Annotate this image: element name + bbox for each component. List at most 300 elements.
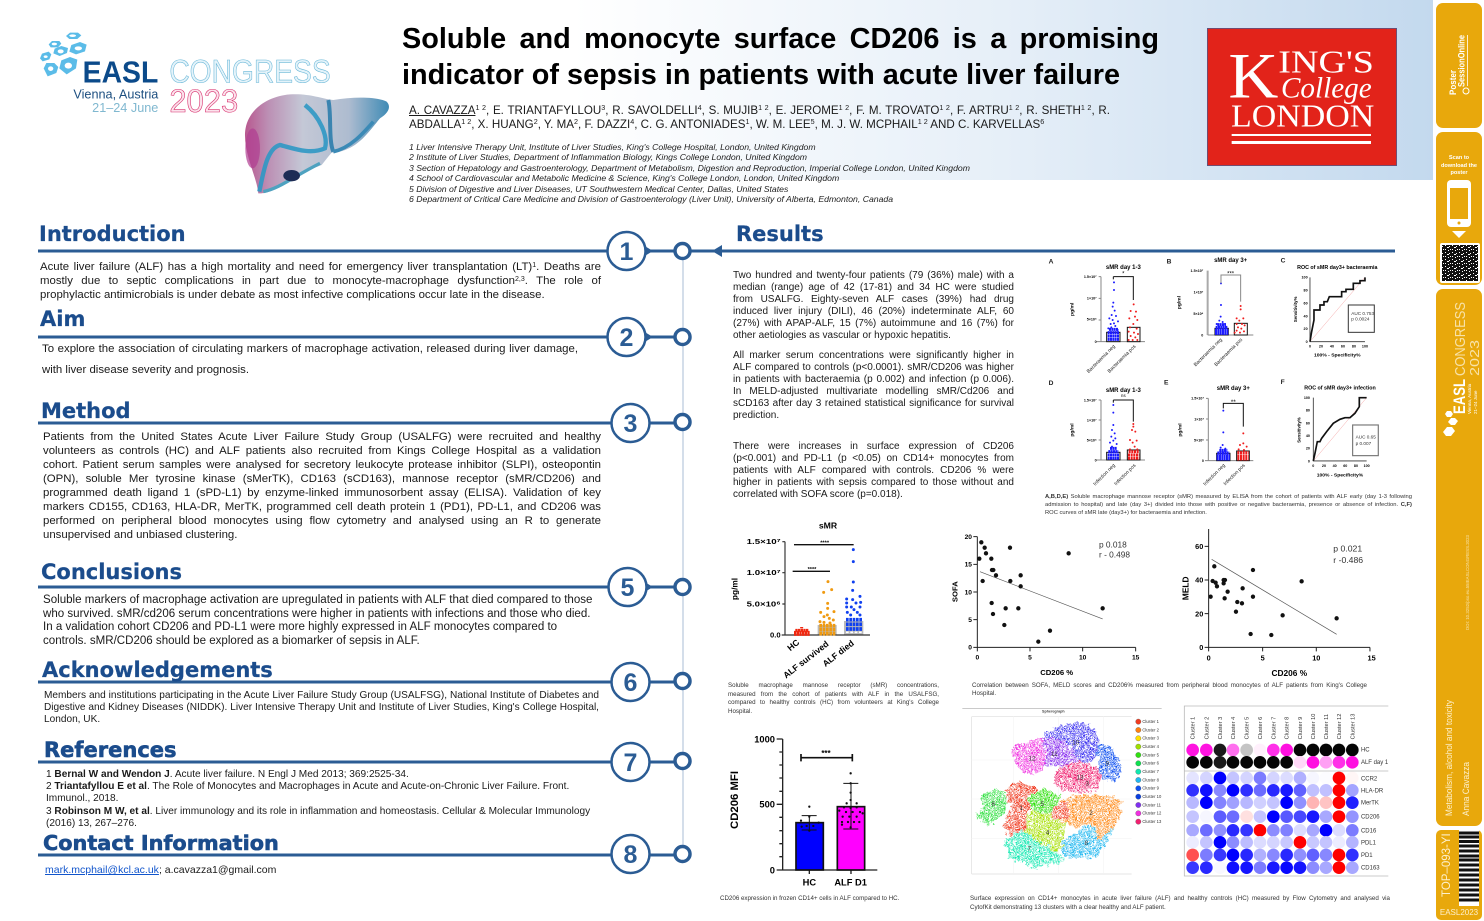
- text: results surface expression: (p<0.001) and PD-L1 (p <0.05) on CD14+ monocytes from: [733, 453, 1014, 464]
- chart D: sMR day 1-3 infection: 1.5×10⁷: [1084, 398, 1097, 402]
- chart B: sMR day 3+ bacteraemia: Bacteraemia neg: [1193, 337, 1224, 368]
- text: results surface expression: correlated with SOFA score (p=0.018).: [733, 489, 903, 500]
- scatter chart: MELD vs CD206%: 40: [1195, 576, 1203, 585]
- scatter chart: SOFA vs CD206%: 0: [968, 645, 972, 652]
- text: references: [46, 769, 590, 829]
- text: introduction: prophylactic antimicrobials is under debate as most infective complications occur late in the disease.: [40, 289, 545, 301]
- heatmap: cluster marker expression: CCR2: [1361, 776, 1378, 782]
- chart F: ROC infection: ROC of sMR day3+ infection: [1304, 385, 1376, 391]
- title: Soluble and monocyte surface CD206 is a promising: [402, 23, 1159, 55]
- text: results marker concentrations: in patients with bacteraemia (p 0.002) and infection (p 0.006).: [733, 374, 1014, 385]
- authors: [409, 103, 1110, 130]
- chart C: ROC bacteraemia: [1281, 258, 1378, 359]
- chart F: ROC infection: 60: [1306, 421, 1310, 425]
- chart B: sMR day 3+ bacteraemia: 1×10⁷: [1194, 290, 1204, 294]
- t-SNE cluster plot: Cluster 9: [1142, 786, 1160, 791]
- section marker 7: 7: [624, 749, 637, 777]
- heatmap: cluster marker expression: Cluster 3: [1218, 717, 1224, 739]
- text: results surface expression: higher in patients with sepsis compared to those without and: [733, 477, 1014, 488]
- chart C: ROC bacteraemia: C: [1281, 258, 1286, 265]
- caption: flow cytometry clusters: CytofKit demonstrating 13 clusters with a clear healthy and ALF patient.: [970, 904, 1166, 910]
- chart D: sMR day 1-3 infection: sMR day 1-3: [1106, 388, 1141, 394]
- chart C: ROC bacteraemia: 20: [1319, 345, 1323, 349]
- chart C: ROC bacteraemia: 100: [1302, 276, 1308, 280]
- caption: panels A-F: [1045, 494, 1412, 516]
- t-SNE cluster plot: Cluster 12: [1142, 811, 1162, 816]
- chart: sMR concentrations HC vs ALF: 0.0: [770, 630, 781, 639]
- chart E: sMR day 3+ infection: pg/ml: [1177, 423, 1183, 437]
- sidebar: PosterSessionOnline panel: [1436, 3, 1482, 128]
- chart: sMR concentrations HC vs ALF: HC: [785, 637, 802, 653]
- chart: sMR concentrations HC vs ALF: 1.0×10⁷: [747, 568, 781, 577]
- scatter chart: MELD vs CD206%: 15: [1368, 653, 1376, 662]
- text: aim: [42, 343, 578, 376]
- text: results summary: from USALFG. Eighty-seven ALF cases (39%) had drug: [733, 294, 1014, 305]
- scatter chart: MELD vs CD206%: p 0.021: [1333, 543, 1362, 553]
- chart A: sMR day 1-3 bacteraemia: 5×10⁶: [1087, 318, 1097, 322]
- t-SNE cluster plot: 2: [1089, 810, 1093, 817]
- text: method: volunteers as controls (HC) and ALF patients also recruited from Kings College Hospital as a validation: [43, 445, 601, 457]
- sidebar: congress and topic panel: CONGRESS: [1452, 302, 1469, 376]
- caption: sMR chart: measured from the cohort of patients with ALF in the USALFSG,: [728, 691, 939, 698]
- caption: panels A-F: ROC curves of sMR late (day3+) for bacteraemia and infection.: [1045, 510, 1207, 516]
- text: conclusions: Soluble markers of macrophage activation are upregulated in patients with ALF that died compared to those: [43, 594, 592, 606]
- heatmap: cluster marker expression: Cluster 12: [1337, 714, 1343, 739]
- affiliations: 3 Section of Hepatology and Gastroenterology, Department of Metabolism, Digestion and Reproduction, Imperial College London, United Kingdom: [409, 163, 970, 173]
- caption: sMR chart: [728, 682, 939, 715]
- t-SNE cluster plot: 3: [1086, 780, 1090, 787]
- t-SNE cluster plot: Cluster 5: [1142, 752, 1160, 757]
- heatmap: cluster marker expression: Cluster 1: [1191, 717, 1197, 739]
- heatmap: cluster marker expression: Cluster 10: [1311, 714, 1317, 739]
- heatmap: cluster marker expression: ALF day 1: [1361, 760, 1389, 766]
- text: acknowledgements: [44, 690, 599, 725]
- heatmap: cluster marker expression: PD1: [1361, 853, 1373, 859]
- text: method: Patients from the United States Acute Liver Failure Study Group (USALFG) were recruited and healthy: [43, 431, 601, 443]
- chart E: sMR day 3+ infection: 1×10⁷: [1194, 417, 1204, 421]
- chart F: ROC infection: 60: [1343, 464, 1347, 468]
- text: aim: To explore the association of circulating markers of macrophage activation, released during liver damage,: [42, 343, 578, 355]
- text: method: unsupervised and unbiased clustering.: [43, 529, 237, 541]
- authors: A. CAVAZZA1 2, E. TRIANTAFYLLOU3, R. SAVOLDELLI4, S. MUJIB1 2, E. JEROME1 2, F. M. TROVATO1 2, F. ARTRU1 2, R. SHETH1 2, R.: [409, 103, 1110, 116]
- caption: flow cytometry clusters: [970, 894, 1390, 910]
- section marker 6: [38, 663, 690, 701]
- text: results marker concentrations: In MELD-adjusted multivariate modelling sMR/Cd206 and: [733, 386, 1014, 397]
- scatter chart: SOFA vs CD206%: 0: [975, 654, 979, 661]
- chart: CD206 MFI bars: ***: [821, 749, 832, 758]
- chart F: ROC infection: 40: [1333, 464, 1337, 468]
- text: acknowledgements: London, UK.: [44, 714, 100, 725]
- sidebar: scan to download panel: poster: [1450, 170, 1468, 176]
- chart B: sMR day 3+ bacteraemia: 5×10⁶: [1193, 312, 1204, 316]
- t-SNE cluster plot: [962, 708, 1162, 874]
- sidebar: PosterSessionOnline panel: SessionOnline: [1456, 35, 1466, 87]
- chart: sMR concentrations HC vs ALF: sMR: [819, 520, 838, 530]
- chart E: sMR day 3+ infection: E: [1164, 380, 1169, 387]
- text: method: cohort. Patient serum samples were analysed for secretory leukocyte protease inhibitor (SLPI), osteopontin: [43, 459, 601, 471]
- affiliations: 6 Department of Critical Care Medicine and Division of Gastroenterology (Liver Unit), University of Alberta, Edmonton, Canada: [409, 194, 893, 204]
- scatter chart: MELD vs CD206%: 5: [1261, 653, 1265, 662]
- heatmap: cluster marker expression: Cluster 6: [1258, 717, 1264, 739]
- text: references: (2016) 13, 267–276.: [46, 818, 137, 829]
- logo: King's College London: K: [1228, 39, 1279, 111]
- t-SNE cluster plot: Cluster 1: [1142, 719, 1160, 724]
- text: references: 2 Triantafyllou E et al. The Role of Monocytes and Macrophages in Acute and Acute-on-Chronic Liver Failure. Front.: [46, 781, 569, 792]
- chart E: sMR day 3+ infection: 0: [1202, 459, 1204, 463]
- chart A: sMR day 1-3 bacteraemia: Bacteraemia neg: [1086, 344, 1117, 375]
- chart D: sMR day 1-3 infection: D: [1049, 380, 1054, 387]
- chart E: sMR day 3+ infection: 5×10⁶: [1194, 438, 1204, 442]
- chart A: sMR day 1-3 bacteraemia: 0: [1095, 340, 1097, 344]
- chart: sMR concentrations HC vs ALF: [729, 520, 870, 680]
- affiliations: 4 School of Cardiovascular and Metabolic Medicine & Science, King's College London, London, United Kingdom: [409, 173, 839, 183]
- heatmap: cluster marker expression: CD206: [1361, 815, 1380, 821]
- chart E: sMR day 3+ infection: **: [1231, 399, 1236, 406]
- text: aim: with liver disease severity and prognosis.: [42, 364, 249, 376]
- text: results surface expression: patients with ALF compared with controls. CD206 % were: [733, 465, 1014, 476]
- chart A: sMR day 1-3 bacteraemia: pg/ml: [1069, 302, 1075, 316]
- chart A: sMR day 1-3 bacteraemia: 1×10⁷: [1087, 297, 1097, 301]
- heatmap: cluster marker expression: CD16: [1361, 828, 1377, 834]
- chart C: ROC bacteraemia: 60: [1341, 345, 1345, 349]
- chart B: sMR day 3+ bacteraemia: 0: [1201, 333, 1203, 337]
- heatmap: cluster marker expression: PDL1: [1361, 840, 1377, 846]
- chart: CD206 MFI bars: [729, 734, 877, 887]
- sidebar: poster code and barcode: [1436, 830, 1482, 920]
- heatmap: cluster marker expression: Cluster 7: [1271, 717, 1277, 739]
- scatter chart: SOFA vs CD206%: SOFA: [950, 581, 959, 602]
- text: acknowledgements: Digestive and Kidney Diseases (NIDDK). Liver Intensive Therapy Unit and Institute of Liver Studies, King's College Hospital,: [44, 702, 599, 713]
- heading: Method: Method: [41, 399, 131, 423]
- text: method: (OPN), soluble Mer tyrosine kinase (sMerTK), CD163 (sCD163), mannose receptor (sMR/CD206) and: [43, 473, 601, 485]
- affiliations: 1 Liver Intensive Therapy Unit, Institute of Liver Studies, King's College Hospital, London, United Kingdom: [409, 142, 816, 152]
- heading: Results: Results: [736, 222, 824, 246]
- chart F: ROC infection: 40: [1306, 434, 1310, 438]
- section marker 1: [38, 232, 690, 270]
- scatter chart: SOFA vs CD206%: 5: [968, 617, 972, 624]
- sidebar: congress and topic panel: 21–24 June: [1473, 390, 1478, 414]
- heatmap: cluster marker expression: Cluster 13: [1350, 714, 1356, 739]
- text: results marker concentrations: ALF compared to controls (p<0.0001). sMR/CD206 was higher: [733, 362, 1014, 373]
- chart E: sMR day 3+ infection: Infection neg: [1202, 463, 1227, 487]
- chart B: sMR day 3+ bacteraemia: sMR day 3+: [1214, 258, 1248, 264]
- t-SNE cluster plot: 10: [1072, 740, 1080, 747]
- scatter chart: MELD vs CD206%: CD206 %: [1271, 668, 1308, 678]
- text: results marker concentrations: [733, 350, 1014, 421]
- logo: King's College London: ING'S: [1278, 45, 1374, 80]
- heatmap: cluster marker expression: CD163: [1361, 866, 1380, 872]
- chart F: ROC infection: F: [1281, 379, 1285, 386]
- results timeline rule with arrow: [690, 245, 1395, 257]
- sidebar: congress and topic panel: DOI: 10.3252/pso.eu.55IEASLCONGRESS.2023: [1465, 534, 1470, 630]
- section marker 8: 8: [624, 841, 638, 869]
- text: conclusions: [43, 594, 592, 647]
- chart F: ROC infection: 80: [1354, 464, 1358, 468]
- sidebar: PosterSessionOnline panel: Poster: [1448, 70, 1458, 95]
- text: references: 3 Robinson M W, et al. Liver immunology and its role in inflammation and homeostasis. Cellular & Molecular Immunology: [46, 806, 590, 817]
- chart C: ROC bacteraemia: 20: [1304, 327, 1308, 331]
- text: introduction: mostly due to septic complications in part due to monocyte-macrophage dysfunction2,3. The role of: [40, 275, 601, 287]
- chart A: sMR day 1-3 bacteraemia: sMR day 1-3: [1106, 265, 1141, 271]
- logo: EASL Congress 2023: [40, 33, 331, 119]
- chart F: ROC infection: [1281, 379, 1378, 479]
- scatter chart: SOFA vs CD206%: 10: [965, 589, 972, 596]
- chart C: ROC bacteraemia: 80: [1352, 345, 1356, 349]
- chart F: ROC infection: 100: [1304, 396, 1310, 400]
- title: [402, 23, 1159, 90]
- heatmap: cluster marker expression: HLA-DR: [1361, 788, 1384, 794]
- timeline connector: [682, 251, 684, 854]
- text: results summary: other aetiologies as vascular or hypoxic hepatitis.: [733, 330, 951, 341]
- text: conclusions: who survived. sMR/cd206 serum concentrations were higher in patients with infections and those who died.: [43, 608, 590, 620]
- heatmap: cluster marker expression: Cluster 2: [1204, 717, 1210, 739]
- t-SNE cluster plot: Cluster 8: [1142, 777, 1160, 782]
- chart: CD206 MFI bars: 1000: [754, 734, 775, 744]
- sidebar: congress and topic panel: [1436, 289, 1482, 826]
- t-SNE cluster plot: 4: [1046, 829, 1050, 836]
- text: method: programmed death ligand 1 (sPD-L1) by enzyme-linked immunosorbent assay (ELISA). Validation of key: [43, 487, 601, 499]
- caption: correlation charts: Hospital.: [972, 690, 996, 697]
- chart: CD206 MFI bars: 500: [759, 800, 775, 810]
- section marker 6: 6: [624, 669, 637, 697]
- t-SNE cluster plot: 7: [1028, 846, 1032, 853]
- heatmap: cluster marker expression: Cluster 9: [1298, 717, 1304, 739]
- scatter chart: MELD vs CD206%: 60: [1195, 542, 1203, 551]
- section marker 5: [38, 568, 690, 606]
- section marker 3: 3: [624, 410, 637, 438]
- text: method: [43, 431, 601, 541]
- t-SNE cluster plot: Cluster 6: [1142, 761, 1160, 766]
- chart C: ROC bacteraemia: p 0.0024: [1351, 317, 1370, 322]
- text: introduction: Acute liver failure (ALF) has a high mortality and need for emergency liver transplantation (LT)1. Deaths are: [40, 261, 601, 273]
- chart F: ROC infection: 20: [1322, 464, 1326, 468]
- sidebar: congress and topic panel: 2023: [1467, 340, 1482, 376]
- t-SNE cluster plot: Cluster 2: [1142, 727, 1160, 732]
- chart C: ROC bacteraemia: 80: [1304, 289, 1308, 293]
- section marker 2: 2: [620, 324, 633, 352]
- text: introduction: [40, 261, 602, 301]
- heatmap: cluster marker expression: MerTK: [1361, 801, 1379, 807]
- caption: correlation charts: [972, 682, 1367, 697]
- chart D: sMR day 1-3 infection: [1049, 380, 1145, 487]
- chart: sMR concentrations HC vs ALF: ALF died: [821, 638, 856, 669]
- logo: EASL Congress 2023: EASL: [83, 55, 158, 89]
- chart F: ROC infection: 20: [1306, 447, 1310, 451]
- chart E: sMR day 3+ infection: 1.5×10⁷: [1191, 397, 1204, 401]
- text: conclusions: In a validation cohort CD206 and PD-L1 were more highly expressed in ALF monocytes compared to: [43, 621, 557, 633]
- chart: CD206 MFI bars: ALF D1: [834, 877, 867, 887]
- t-SNE cluster plot: 8: [1085, 840, 1089, 847]
- text: results marker concentrations: All marker serum concentrations were significantly higher in: [733, 350, 1014, 360]
- chart D: sMR day 1-3 infection: 0: [1095, 458, 1097, 462]
- chart C: ROC bacteraemia: 100: [1362, 345, 1368, 349]
- t-SNE cluster plot: 12: [1028, 755, 1036, 762]
- chart C: ROC bacteraemia: 40: [1330, 345, 1334, 349]
- caption: sMR chart: compared to healthy controls (HC) from volunteers at King's College: [728, 699, 939, 706]
- chart: CD206 MFI bars: 0: [770, 865, 775, 875]
- caption: flow cytometry clusters: Surface expression on CD14+ monocytes in acute liver failure (ALF) and healthy controls (HC) measured by Flow Cytometry and analysed via: [970, 894, 1390, 902]
- t-SNE cluster plot: Spheregraph: [1042, 710, 1065, 714]
- chart C: ROC bacteraemia: Sensitivity%: [1293, 296, 1298, 322]
- scatter chart: SOFA vs CD206%: 5: [1028, 654, 1032, 661]
- t-SNE cluster plot: 6: [992, 801, 996, 808]
- caption: sMR chart: Soluble macrophage mannose receptor (sMR) concentrations,: [728, 682, 939, 689]
- scatter chart: MELD vs CD206%: 0: [1207, 653, 1211, 662]
- header background band: [0, 0, 1433, 180]
- section marker 3: [38, 404, 690, 442]
- chart F: ROC infection: 100% - Specificity%: [1317, 473, 1364, 479]
- scatter chart: SOFA vs CD206%: 15: [965, 562, 972, 569]
- scatter chart: MELD vs CD206%: 10: [1312, 653, 1320, 662]
- t-SNE cluster plot: 11: [1051, 751, 1058, 758]
- chart A: sMR day 1-3 bacteraemia: Bacteraemia pos: [1107, 343, 1138, 375]
- chart B: sMR day 3+ bacteraemia: B: [1167, 258, 1172, 265]
- text: results summary: Two hundred and twenty-four patients (79 (36%) male) with a: [733, 270, 1014, 281]
- heading: Introduction: Introduction: [39, 222, 186, 246]
- chart E: sMR day 3+ infection: Infection pos: [1222, 462, 1247, 487]
- text: results summary: induced liver injury (DILI), 46 (20%) indeterminate ALF, 60: [733, 306, 1014, 317]
- chart D: sMR day 1-3 infection: pg/ml: [1069, 423, 1075, 437]
- heading: Aim: Aim: [40, 307, 85, 331]
- section marker 5: 5: [621, 574, 635, 602]
- scatter chart: MELD vs CD206%: MELD: [1181, 577, 1191, 600]
- chart C: ROC bacteraemia: 0: [1309, 345, 1311, 349]
- chart F: ROC infection: AUC 0.65: [1356, 435, 1376, 440]
- sidebar: congress and topic panel: EASL: [1450, 379, 1469, 414]
- scatter chart: SOFA vs CD206%: 20: [965, 534, 972, 541]
- text: contact information: mark.mcphail@kcl.ac.uk; a.cavazza1@gmail.com: [45, 864, 276, 876]
- heading: Acknowledgements: Acknowledgements: [42, 658, 273, 682]
- sidebar: poster code and barcode: TOP–093-YI: [1441, 833, 1453, 897]
- scatter chart: SOFA vs CD206%: 15: [1132, 654, 1140, 661]
- heatmap: cluster marker expression: HC: [1361, 748, 1370, 754]
- chart: sMR concentrations HC vs ALF: ALF survived: [781, 639, 831, 680]
- caption: sMR chart: Hospital.: [728, 708, 752, 715]
- logo: EASL Congress 2023: 2023: [169, 83, 238, 119]
- sidebar: congress and topic panel: Anna Cavazza: [1461, 761, 1472, 816]
- chart A: sMR day 1-3 bacteraemia: A: [1049, 258, 1054, 265]
- t-SNE cluster plot: Cluster 13: [1142, 819, 1162, 824]
- sidebar: congress and topic panel: Metabolism, alcohol and toxicity: [1444, 700, 1455, 816]
- heatmap: cluster marker expression: Cluster 11: [1324, 714, 1330, 739]
- scatter chart: SOFA vs CD206%: [950, 534, 1140, 677]
- logo: EASL Congress 2023: Vienna, Austria: [73, 87, 159, 101]
- chart B: sMR day 3+ bacteraemia: [1167, 258, 1253, 368]
- scatter chart: SOFA vs CD206%: CD206 %: [1040, 668, 1073, 677]
- text: results surface expression: There were increases in surface expression of CD206: [733, 440, 1014, 452]
- logo: King's College London: LONDON: [1231, 98, 1374, 134]
- scatter chart: SOFA vs CD206%: p 0.018: [1099, 539, 1127, 549]
- chart: sMR concentrations HC vs ALF: ****: [820, 540, 830, 546]
- chart E: sMR day 3+ infection: sMR day 3+: [1217, 386, 1250, 392]
- logo: King's College London: [1207, 28, 1397, 166]
- authors: ABDALLA1 2, X. HUANG2, Y. MA2, F. DAZZI4, C. G. ANTONIADES1, W. M. LEE5, M. J. W. MCPHAIL1 2 AND C. KARVELLAS6: [409, 117, 1044, 130]
- chart F: ROC infection: Sensitivity%: [1296, 417, 1301, 443]
- scatter chart: MELD vs CD206%: [1181, 529, 1376, 678]
- logo: EASL Congress 2023: 21–24 June: [92, 101, 158, 115]
- chart: sMR concentrations HC vs ALF: pg/ml: [729, 578, 739, 600]
- t-SNE cluster plot: Cluster 3: [1142, 736, 1160, 741]
- t-SNE cluster plot: 9: [1106, 760, 1110, 767]
- chart B: sMR day 3+ bacteraemia: 1.5×10⁷: [1191, 269, 1204, 273]
- title: indicator of sepsis in patients with acute liver failure: [402, 58, 1120, 90]
- chart: sMR concentrations HC vs ALF: ****: [808, 567, 817, 573]
- sidebar: congress and topic panel: Vienna, Austria: [1467, 383, 1472, 414]
- scatter chart: MELD vs CD206%: r -0.486: [1333, 555, 1363, 565]
- logo: EASL Congress 2023: CONGRESS: [169, 54, 331, 90]
- text: results summary: median (range) age of 42 (17-81) and 34 HC were studied: [733, 282, 1014, 293]
- chart C: ROC bacteraemia: 100% - Specificity%: [1314, 353, 1361, 359]
- section marker 1: 1: [620, 238, 634, 266]
- chart B: sMR day 3+ bacteraemia: ***: [1227, 271, 1235, 277]
- chart: CD206 MFI bars: HC: [803, 877, 816, 887]
- heading: Contact Information: Contact Information: [43, 831, 279, 855]
- chart D: sMR day 1-3 infection: Infection pos: [1113, 462, 1138, 487]
- chart: CD206 MFI bars: CD206 MFI: [729, 771, 741, 829]
- t-SNE cluster plot: Cluster 4: [1142, 744, 1160, 749]
- chart C: ROC bacteraemia: 0: [1306, 340, 1308, 344]
- chart E: sMR day 3+ infection: [1164, 380, 1253, 487]
- chart: sMR concentrations HC vs ALF: 5.0×10⁶: [747, 599, 781, 608]
- scatter chart: MELD vs CD206%: 20: [1195, 609, 1203, 618]
- chart C: ROC bacteraemia: ROC of sMR day3+ bacteraemia: [1297, 265, 1378, 271]
- heading: Conclusions: Conclusions: [41, 560, 182, 584]
- caption: correlation charts: Correlation between SOFA, MELD scores and CD206% measured from peripheral blood monocytes of ALF patients from King's College: [972, 682, 1367, 688]
- scatter chart: SOFA vs CD206%: 10: [1079, 654, 1087, 661]
- affiliations: [409, 142, 970, 204]
- chart C: ROC bacteraemia: 40: [1304, 314, 1308, 318]
- text: method: markers CD155, CD163, HLA-DR, MerTK, programmed cell death protein 1 (PD1), PD-L1, and CD206 was: [43, 501, 601, 513]
- logo: King's College London: College: [1281, 71, 1372, 104]
- section marker 7: [38, 743, 690, 781]
- chart F: ROC infection: 0: [1308, 459, 1310, 463]
- sidebar: scan to download panel: [1436, 132, 1482, 285]
- chart F: ROC infection: 80: [1306, 409, 1310, 413]
- text: results marker concentrations: prediction.: [733, 410, 779, 421]
- chart A: sMR day 1-3 bacteraemia: *: [1122, 271, 1125, 277]
- chart A: sMR day 1-3 bacteraemia: [1049, 258, 1145, 375]
- affiliations: 2 Institute of Liver Studies, Department of Inflammation Biology, Kings College London, United Kingdom: [409, 152, 807, 162]
- heatmap: cluster marker expression: [1184, 706, 1389, 876]
- sidebar: scan to download panel: Scan to: [1449, 155, 1470, 161]
- caption: panels A-F: admission to hospital) and late (day 3+) divided into those with positive or negative bacteraemia, presence or absence of infection. C,F): [1045, 502, 1412, 508]
- heatmap: cluster marker expression: Cluster 8: [1285, 717, 1291, 739]
- chart B: sMR day 3+ bacteraemia: Bacteraemia pos: [1213, 337, 1244, 368]
- caption: panels A-F: A,B,D,E) Soluble macrophage mannose receptor (sMR) measured by ELISA from the cohort of patients with ALF early (day 1-3 following: [1045, 494, 1412, 500]
- text: results surface expression: [733, 440, 1014, 500]
- chart A: sMR day 1-3 bacteraemia: 1.5×10⁷: [1084, 275, 1097, 279]
- chart C: ROC bacteraemia: AUC 0.753: [1351, 311, 1374, 316]
- t-SNE cluster plot: Cluster 11: [1142, 802, 1162, 807]
- chart D: sMR day 1-3 infection: 5×10⁶: [1087, 438, 1097, 442]
- chart D: sMR day 1-3 infection: ns: [1121, 393, 1126, 398]
- t-SNE cluster plot: 13: [1076, 774, 1084, 781]
- icon: liver illustration: [245, 94, 389, 193]
- text: results marker concentrations: sCD163 after day 3 retained statistical significance for survival: [733, 398, 1014, 409]
- text: acknowledgements: Members and institutions participating in the Acute Liver Failure Study Group (USALFSG), National Institute of Diabetes and: [44, 690, 599, 701]
- affiliations: 5 Division of Digestive and Liver Diseases, UT Southwestern Medical Center, Dallas, United States: [409, 184, 788, 194]
- text: method: performed on peripheral blood monocytes using flow cytometry and analysed using an R to generate: [43, 515, 601, 527]
- t-SNE cluster plot: 1: [1020, 805, 1024, 812]
- chart D: sMR day 1-3 infection: 1×10⁷: [1087, 418, 1097, 422]
- t-SNE cluster plot: 5: [1041, 801, 1045, 808]
- chart: sMR concentrations HC vs ALF: 1.5×10⁷: [747, 537, 781, 546]
- text: references: 1 Bernal W and Wendon J. Acute liver failure. N Engl J Med 2013; 369:2525-34.: [46, 769, 409, 780]
- chart C: ROC bacteraemia: 60: [1304, 301, 1308, 305]
- text: references: Immunol., 2018.: [46, 793, 118, 804]
- chart F: ROC infection: 0: [1312, 464, 1314, 468]
- caption: CD206 MFI chart: CD206 expression in frozen CD14+ cells in ALF compared to HC.: [720, 895, 899, 902]
